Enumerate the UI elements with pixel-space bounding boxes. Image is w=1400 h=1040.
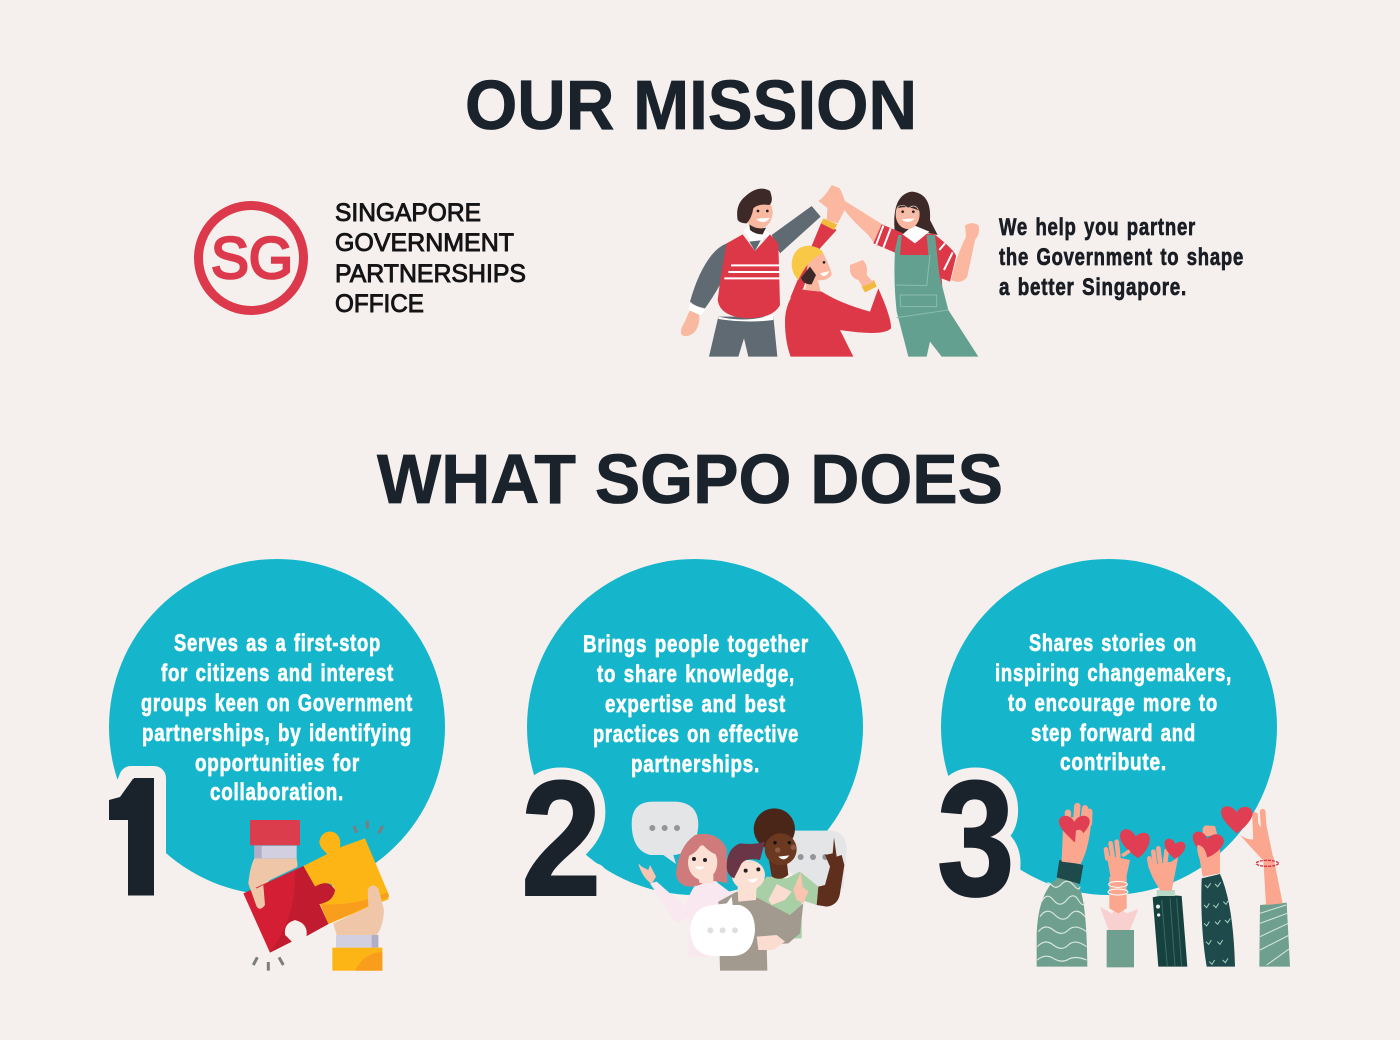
text 3: inspiring changemakers, [995,660,1232,687]
numeral 3 fill: 3 [937,747,1015,931]
teal circle 2 [527,559,863,895]
body copy: mission statement: We help you partner [999,214,1196,241]
hand 3 [1148,839,1187,967]
text 3: to encourage more to [1008,690,1218,717]
logo wordmark: OFFICE [335,290,424,318]
teal circle 3 [941,559,1277,895]
body copy: mission statement [999,214,1244,301]
numeral 2 fill: 2 [521,746,601,930]
text 1: groups keen on Government [141,690,413,717]
man with vest [681,185,840,357]
hand 4 [1193,825,1235,967]
numeral 2 halo: 2 [521,746,601,930]
text 2: expertise and best [605,691,786,718]
logo wordmark: PARTNERSHIPS [335,260,526,288]
body copy: mission statement: the Government to shape [999,244,1244,271]
numeral 1: 1 [90,743,183,931]
text 2: Brings people together [583,631,809,658]
logo wordmark [335,199,526,318]
illustration: three people high-five [681,185,979,357]
text 2: to share knowledge, [597,661,795,688]
panel 3: shares stories [937,559,1290,967]
hand 2 [1100,825,1153,967]
text 2: partnerships. [631,751,760,778]
hand 1 [1037,806,1092,967]
text 3: Shares stories on [1029,630,1197,657]
hand 5 [1221,806,1290,967]
text 1 [141,630,413,806]
text 3: step forward and [1031,720,1196,747]
logo wordmark: GOVERNMENT [335,229,514,257]
woman in overalls [843,192,979,357]
panel 2: brings people together [521,559,863,971]
text 2: practices on effective [593,721,799,748]
icon: hands with hearts [1037,806,1290,967]
infographic canvas [109,80,1290,971]
logo ring with SG [198,206,304,310]
panel 1: first-stop [90,559,445,971]
text 3: contribute. [1060,749,1167,776]
logo wordmark: SINGAPORE [335,199,481,227]
numeral 3 halo: 3 [937,747,1015,931]
text 2 [583,631,809,778]
text 1: collaboration. [210,779,344,806]
text 1: partnerships, by identifying [142,720,412,747]
icon: puzzle hands [243,820,389,971]
heading: what SGPO does: WHAT SGPO DOES [377,440,1003,518]
text 3 [995,630,1232,776]
text 1: for citizens and interest [161,660,394,687]
teal circle 1 [109,559,445,895]
title: our mission: OUR MISSION [465,66,917,144]
icon: people talking [632,802,847,971]
SGPO logo [198,199,526,318]
man with helmet [785,188,891,357]
body copy: mission statement: a better Singapore. [999,274,1187,301]
text 1: opportunities for [195,750,360,777]
numeral halo 1 [108,778,154,895]
logo ring with SG: SG [211,226,293,291]
text 1: Serves as a first-stop [174,630,381,657]
numeral 1 [109,778,154,896]
